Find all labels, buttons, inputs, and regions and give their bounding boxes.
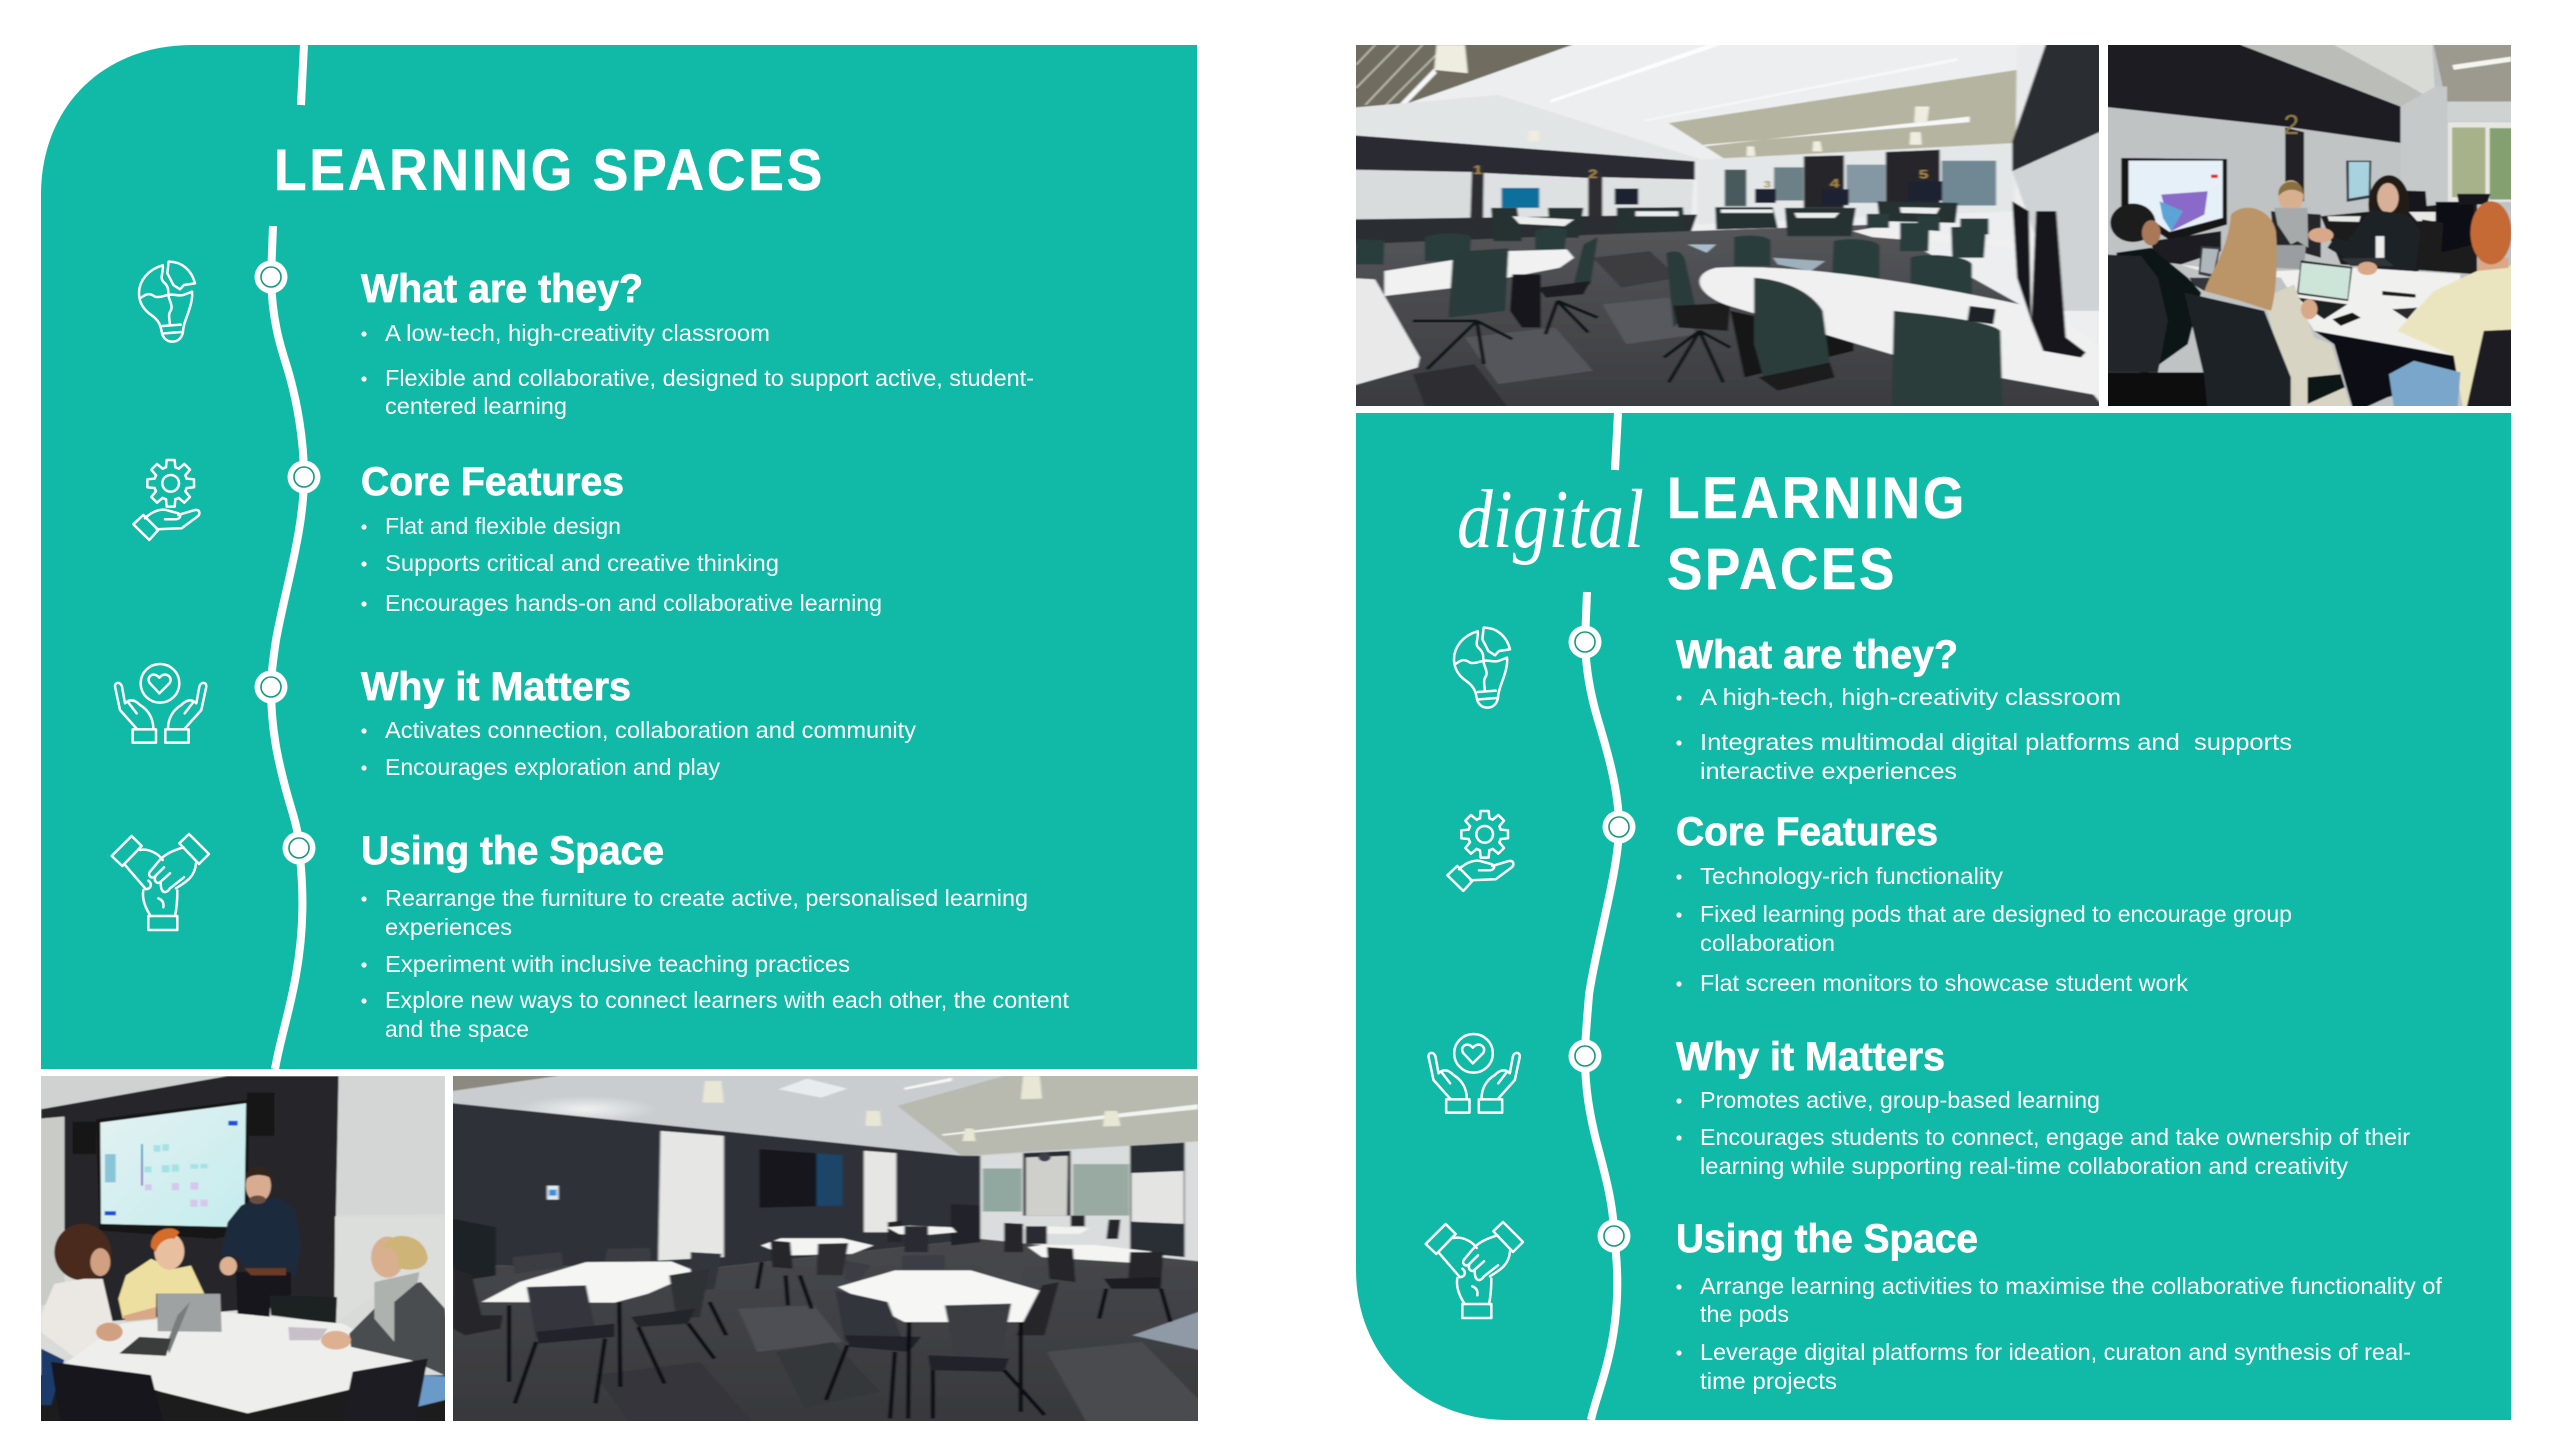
bullet list: Experiment with inclusive teaching practices [385,951,850,977]
panel background [1356,413,2511,1420]
title: LEARNING SPACES [274,138,825,203]
heading: What are they? [361,267,643,311]
bullet list: Rearrange the furniture to create active, personalised learning [385,885,1028,911]
heading: Core Features [361,460,624,504]
icon: hands holding heart [115,664,206,743]
photo: students collaborating at pod [2108,45,2511,406]
bullet list: Promotes active, group-based learning [1700,1087,2100,1113]
bullet list [1676,1087,2410,1179]
bullet list: and the space [385,1016,529,1042]
photo: digital classroom with pods: 3 [1764,180,1771,190]
bullet list: Supports critical and creative thinking [385,550,779,576]
timeline node 4 [282,832,316,864]
bullet list: Encourages exploration and play [385,754,720,780]
timeline node 3 [254,670,288,704]
photo: digital classroom with pods: 1 [1473,164,1483,177]
section: what are they [361,267,1034,419]
timeline node 4 [1598,1220,1630,1252]
section: why it matters [1676,1035,2410,1179]
bullet list: the pods [1700,1301,1789,1327]
icon: three joined hands [1426,1222,1523,1318]
bullet list: A high-tech, high-creativity classroom [1700,684,2121,710]
timeline node 1 [254,260,288,294]
bullet list: experiences [385,914,512,940]
timeline node 1 [1568,626,1602,658]
section: why it matters [361,665,916,780]
bullet list: collaboration [1700,930,1835,956]
heading: Using the Space [361,829,664,873]
heading: What are they? [1676,633,1958,677]
photo: low-tech room with hexagonal tables [453,1076,1198,1421]
digital title word: digital [1457,473,1644,566]
section: what are they [1676,633,2292,784]
bullet list [361,320,1034,419]
section: using the space [361,829,1070,1042]
bullet list: Technology-rich functionality [1700,863,2004,889]
bullet list [361,885,1070,1042]
bullet list: Explore new ways to connect learners with each other, the content [385,987,1070,1013]
timeline node 2 [288,460,320,494]
icon: gear in hand [133,460,199,540]
heading: Using the Space [1676,1217,1978,1261]
bullet list: Encourages hands-on and collaborative learning [385,590,882,616]
section: core features [1676,810,2292,996]
panel background [41,45,1197,1069]
photo: digital classroom with pods: 2 [1588,168,1598,181]
bullet list: A low-tech, high-creativity classroom [385,320,770,346]
panel: learning spaces [41,45,1197,1069]
heading: Core Features [1676,810,1938,854]
bullet list: Leverage digital platforms for ideation, curaton and synthesis of real- [1700,1339,2411,1365]
bullet list: time projects [1700,1368,1837,1394]
bullet list: Flexible and collaborative, designed to support active, student- [385,365,1034,391]
icon: three joined hands [112,834,209,930]
bullet list: Flat and flexible design [385,513,621,539]
photo: digital classroom with pods: 4 [1830,178,1840,191]
timeline top stub [301,45,304,105]
bullet list: interactive experiences [1700,758,1957,784]
bullet list: Fixed learning pods that are designed to encourage group [1700,901,2292,927]
bullet list [1676,1273,2443,1394]
timeline curve [271,226,304,1069]
heading: Why it Matters [1676,1035,1945,1079]
bullet list: learning while supporting real-time collaboration and creativity [1700,1153,2349,1179]
bullet list [361,717,916,780]
icon: gear in hand [1447,811,1513,891]
bullet list [1676,863,2292,996]
timeline curve [1585,592,1619,1420]
bullet list [1676,684,2292,784]
icon: puzzle light bulb [139,262,195,342]
section: core features [361,460,882,616]
bullet list: Encourages students to connect, engage and take ownership of their [1700,1124,2410,1150]
section: using the space [1676,1217,2443,1394]
title line 2: SPACES [1667,537,1897,602]
photo: digital classroom with pods: 5 [1919,169,1928,182]
title line 1: LEARNING [1667,466,1967,531]
heading: Why it Matters [361,665,631,709]
bullet list: Activates connection, collaboration and community [385,717,916,743]
bullet list: Integrates multimodal digital platforms and supports [1700,729,2292,755]
icon: puzzle light bulb [1454,628,1510,708]
bullet list: centered learning [385,393,567,419]
photo: digital classroom with pods [1356,45,2099,406]
timeline node 3 [1568,1040,1602,1072]
timeline node 2 [1602,810,1636,844]
panel: digital learning spaces [1356,413,2511,1420]
bullet list: Arrange learning activities to maximise the collaborative functionality of [1700,1273,2443,1299]
bullet list [361,513,882,616]
timeline top stub [1615,413,1618,470]
icon: hands holding heart [1428,1034,1520,1113]
photo: four people at table with whiteboard screen [41,1076,445,1421]
bullet list: Flat screen monitors to showcase student work [1700,970,2189,996]
photo: students collaborating at pod: 2 [2284,109,2299,140]
